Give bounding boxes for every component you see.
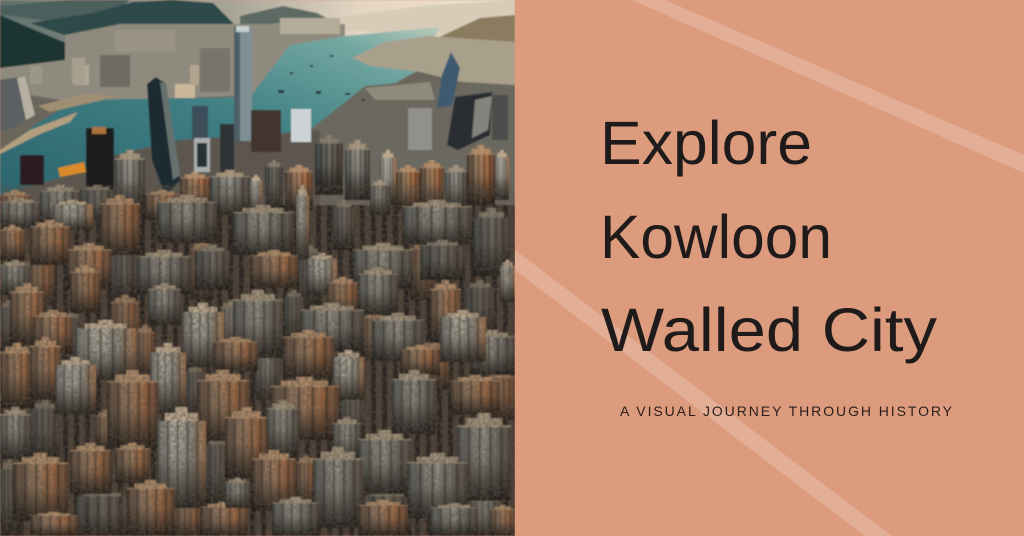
- boats: [278, 55, 365, 101]
- filler high-rises: [0, 240, 515, 536]
- small glass tower: [192, 106, 210, 172]
- IFC tower: [234, 26, 252, 141]
- rear high-rises: [0, 185, 515, 302]
- title line 2: Kowloon: [600, 203, 832, 271]
- right peninsula mass: [352, 36, 515, 86]
- short dark tower: [20, 155, 44, 185]
- right office tower: [408, 108, 432, 150]
- brown tower: [251, 110, 281, 152]
- orange roof building: [58, 162, 86, 177]
- dark curved tower: [147, 77, 180, 196]
- dark tower orange roof: [92, 127, 106, 134]
- dense lower city base: [0, 205, 515, 536]
- left waterfront tower: [0, 76, 26, 130]
- panel: background: [515, 0, 1024, 536]
- sky: [0, 0, 513, 42]
- far-side shore: [0, 112, 78, 154]
- title line 3: Walled City: [601, 296, 938, 364]
- waterfront complex: [365, 82, 435, 100]
- foreground skyline mass: [18, 130, 320, 206]
- mountains: [0, 0, 515, 75]
- panel: aerial city photo: [0, 0, 515, 536]
- photo base: [0, 70, 460, 150]
- subtitle: A VISUAL JOURNEY THROUGH HISTORY: [620, 403, 953, 419]
- right foreground mass: [311, 82, 515, 132]
- building grain texture: [0, 185, 515, 536]
- black framed tower: [447, 92, 492, 150]
- diagonal stripe: bottom: [515, 250, 892, 536]
- dark brown tower: [86, 128, 114, 190]
- title line 1: Explore: [600, 109, 812, 177]
- white tower: [291, 109, 311, 142]
- mid dark tower: [220, 124, 234, 172]
- middle high-rises: [0, 265, 515, 413]
- harbour water: [0, 27, 440, 195]
- spire tower: [437, 52, 460, 108]
- title: [600, 109, 938, 364]
- distant pale ridge: [354, 0, 515, 36]
- front high-rises: [0, 357, 515, 536]
- skyline midground buildings: [0, 135, 509, 225]
- distant city mass: [0, 24, 345, 100]
- distant tower blocks: [30, 18, 340, 98]
- diagonal stripe: top: [632, 0, 1024, 173]
- right tower: [492, 95, 508, 140]
